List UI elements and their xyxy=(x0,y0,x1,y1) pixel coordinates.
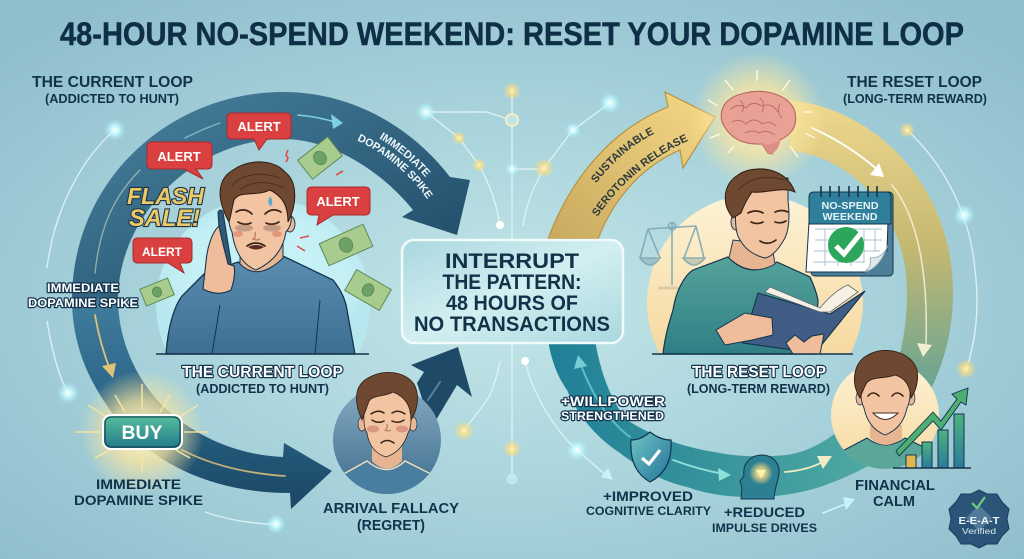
face xyxy=(748,210,788,243)
label: reset loop caption: THE RESET LOOP xyxy=(692,364,826,381)
callout: interrupt the pattern: 48 HOURS OF xyxy=(446,292,578,315)
badge: E-E-A-T verified xyxy=(949,490,1009,548)
hands xyxy=(716,313,773,345)
alert 1: ALERT xyxy=(237,119,281,134)
badge: E-E-A-T verified: E-E-A-T xyxy=(958,516,1000,527)
label: willpower: STRENGTHENED xyxy=(561,409,664,423)
label: immediate dopamine spike (bottom) xyxy=(74,476,203,508)
phone xyxy=(218,210,231,268)
label: financial calm: CALM xyxy=(873,494,915,510)
label: improved cognitive clarity: +IMPROVED xyxy=(603,488,693,504)
ears xyxy=(285,216,295,232)
flash sale text: SALE! xyxy=(129,205,200,232)
arrow text: immediate dopamine spike on arc: DOPAMINE SPIKE xyxy=(358,134,433,199)
alert 4: ALERT xyxy=(142,245,183,259)
flash sale text xyxy=(127,183,204,232)
label: arrival fallacy: ARRIVAL FALLACY xyxy=(323,501,459,517)
label: reduced impulse drives xyxy=(712,504,817,535)
icon: alert bubbles xyxy=(133,113,370,273)
hair xyxy=(725,169,795,218)
illustration: regret portrait xyxy=(333,372,441,500)
label: immediate dopamine spike (bottom): IMMEDIATE xyxy=(96,476,181,492)
label: financial calm: FINANCIAL xyxy=(855,478,935,494)
alert 3 xyxy=(307,187,370,225)
halo xyxy=(156,198,370,354)
callout: interrupt the pattern: INTERRUPT xyxy=(445,250,579,273)
arc: teal bottom arc xyxy=(548,340,870,497)
icon: buy button with glow: BUY xyxy=(122,423,163,444)
label: reset loop caption: (LONG-TERM REWARD) xyxy=(687,382,830,396)
chart bars xyxy=(906,414,964,468)
alert 1 xyxy=(227,113,291,150)
icon: glowing brain xyxy=(690,52,826,188)
book xyxy=(743,291,865,353)
label: immediate dopamine spike (left): DOPAMINE SPIKE xyxy=(28,296,138,310)
label: improved cognitive clarity xyxy=(586,488,711,518)
scale icon xyxy=(640,222,705,288)
panel: reset loop arcs xyxy=(548,92,953,513)
bill 3 xyxy=(345,270,391,310)
arrow text: sustainable serotonin release: SEROTONIN RELEASE xyxy=(592,134,688,216)
label: immediate dopamine spike (bottom): DOPAMINE SPIKE xyxy=(74,492,203,508)
arrow: gold sustainable serotonin xyxy=(548,92,715,239)
label: reset loop heading: THE RESET LOOP xyxy=(847,74,982,91)
badge: E-E-A-T verified: Verified xyxy=(962,526,996,536)
label: reset loop caption xyxy=(687,364,830,396)
alert 3: ALERT xyxy=(316,194,360,209)
alert 2 xyxy=(147,142,212,179)
sweater xyxy=(166,256,355,354)
hair xyxy=(220,162,295,222)
callout: interrupt the pattern: THE PATTERN: xyxy=(442,271,582,294)
alert 4 xyxy=(133,238,192,273)
label: current loop caption xyxy=(182,364,343,396)
illustration: stressed man with alerts xyxy=(156,150,370,354)
label: immediate dopamine spike (left): IMMEDIATE xyxy=(47,281,119,295)
arc: gold right arc xyxy=(790,100,953,425)
bill 2 xyxy=(319,224,373,266)
icon: money bills xyxy=(140,137,391,310)
label: financial calm xyxy=(855,478,935,510)
icon: head with light bulb xyxy=(740,455,779,499)
icon: buy button with glow xyxy=(75,370,208,494)
arrow text: immediate dopamine spike on arc: IMMEDIATE xyxy=(380,132,431,177)
neck xyxy=(240,240,283,272)
baseline xyxy=(156,353,369,355)
hand xyxy=(203,226,235,293)
neck xyxy=(729,240,775,270)
stress marks xyxy=(286,150,343,251)
halo xyxy=(647,195,863,354)
arrow: top arc to centre xyxy=(72,92,470,300)
icon: shield xyxy=(631,432,671,482)
label: immediate dopamine spike (left) xyxy=(28,281,138,310)
callout: interrupt the pattern: NO TRANSACTIONS xyxy=(414,313,610,336)
alert 2: ALERT xyxy=(157,149,201,164)
icon: no-spend calendar: NO-SPEND xyxy=(822,201,878,212)
label: current loop heading: (ADDICTED TO HUNT) xyxy=(45,92,179,106)
label: current loop heading xyxy=(32,74,193,106)
label: current loop caption: (ADDICTED TO HUNT) xyxy=(196,382,329,396)
icon: no-spend calendar: WEEKEND xyxy=(822,212,878,223)
head xyxy=(229,172,291,270)
flash sale text: FLASH xyxy=(127,183,204,209)
label: reset loop heading: (LONG-TERM REWARD) xyxy=(843,92,987,106)
label: reset loop heading xyxy=(843,74,987,106)
label: arrival fallacy xyxy=(323,501,459,534)
arrow: lower arc to regret xyxy=(72,298,332,509)
callout: interrupt the pattern xyxy=(402,240,623,343)
network lines and glowing nodes xyxy=(47,82,977,534)
label: current loop heading: THE CURRENT LOOP xyxy=(32,74,193,91)
label: arrival fallacy: (REGRET) xyxy=(357,518,425,534)
face details xyxy=(236,210,281,246)
baseline xyxy=(652,353,853,355)
sweater xyxy=(663,257,818,354)
label: reduced impulse drives: IMPULSE DRIVES xyxy=(712,521,817,535)
label: reduced impulse drives: +REDUCED xyxy=(724,504,805,520)
illustration: calm man reading xyxy=(640,169,865,354)
icon: no-spend calendar xyxy=(806,186,893,276)
inner arrow strokes xyxy=(95,115,440,476)
arrow text: sustainable serotonin release: SUSTAINABLE xyxy=(591,127,654,182)
head xyxy=(736,178,789,258)
label: willpower: +WILLPOWER xyxy=(561,393,665,409)
label: current loop caption: THE CURRENT LOOP xyxy=(182,364,343,381)
label: willpower xyxy=(561,393,665,423)
bill 1 xyxy=(298,137,342,179)
arc arrows xyxy=(581,128,926,513)
illustration: happy man with rising chart xyxy=(831,350,971,480)
arrow: regret to centre xyxy=(411,347,472,420)
label: improved cognitive clarity: COGNITIVE CLARITY xyxy=(586,506,711,518)
panel: current loop arrows xyxy=(72,92,472,509)
bill 4 xyxy=(140,278,174,306)
ear xyxy=(731,214,741,230)
